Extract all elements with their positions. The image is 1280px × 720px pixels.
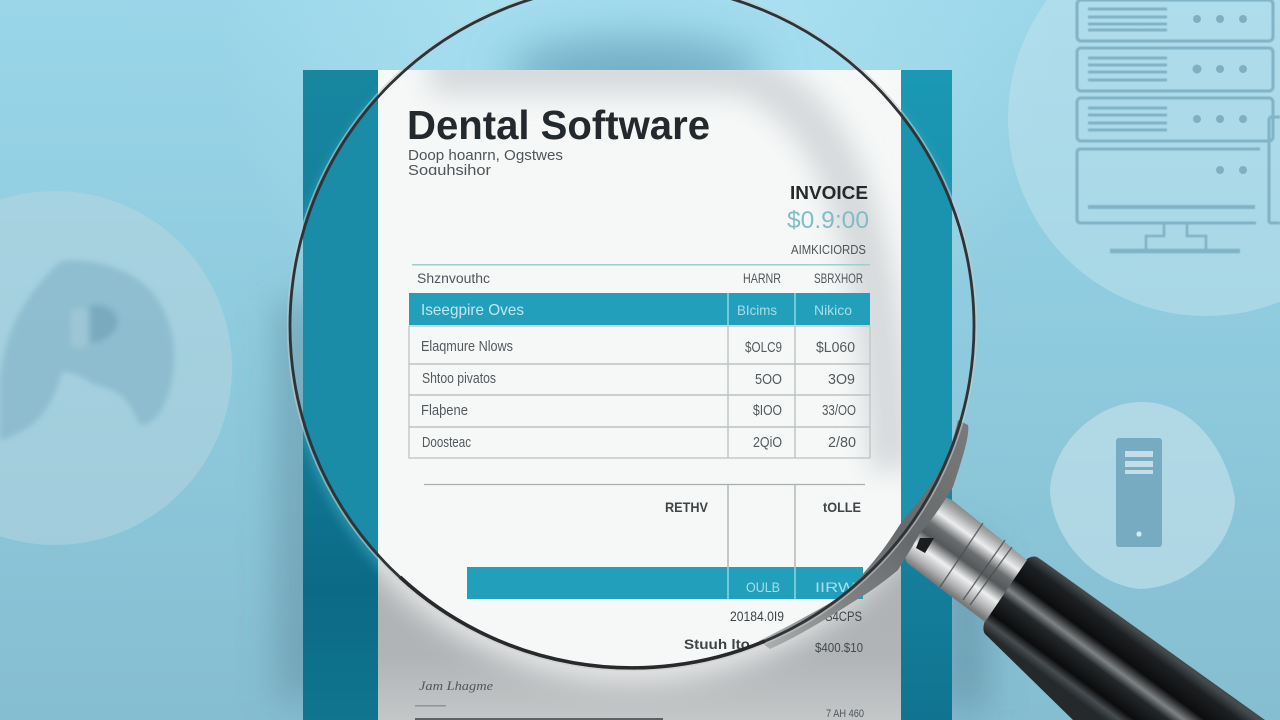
invoice label and amount: $0.9:00 — [787, 207, 869, 234]
table header bar: Iseegpire Oves — [421, 302, 524, 319]
table rows: $L060 — [816, 340, 855, 356]
document shadow left — [280, 300, 320, 700]
signature area: 7 AH 460 — [826, 708, 864, 720]
table header bar: Nikico — [814, 302, 852, 318]
totals section — [424, 484, 865, 655]
table rule and column headings: SBRXHOR — [814, 271, 863, 286]
table rows: $IOO — [753, 403, 782, 419]
document shadow right — [945, 540, 985, 710]
handle grip — [983, 557, 1265, 720]
totals section: $400.$10 — [815, 640, 863, 655]
icon: server rack and monitor badge — [1008, 0, 1280, 316]
table rows: 3O9 — [828, 372, 855, 388]
totals section: RETHV — [665, 499, 709, 515]
invoice content — [407, 102, 870, 720]
table rows: Doosteac — [422, 435, 471, 451]
table rows: 2QiO — [753, 435, 782, 451]
totals section: S4CPS — [825, 609, 862, 624]
icon: tower server badge — [1050, 402, 1235, 589]
total bar: OULB — [746, 579, 780, 595]
total bar: IIRW — [815, 579, 856, 595]
subtitle lines: Doop hoanrn, Ogstwes — [408, 148, 563, 164]
lens ring lower thick arc — [400, 577, 765, 668]
magnifying glass — [288, 0, 1265, 720]
table rule and column headings: Shznvouthc — [417, 271, 490, 286]
table header bar — [409, 293, 870, 325]
lens ring highlight — [288, 0, 976, 670]
table rows: $OLC9 — [745, 340, 782, 356]
totals section: Stuuh lto — [684, 636, 750, 652]
invoice label and amount: INVOICE — [790, 183, 868, 203]
lens halo on teal — [303, 98, 952, 572]
table rows — [421, 339, 856, 451]
total bar — [467, 567, 863, 599]
lens ring — [290, 0, 974, 668]
signature area — [415, 678, 864, 720]
subtitle lines — [408, 148, 563, 179]
table rule and column headings — [412, 264, 870, 286]
title: Dental Software — [407, 102, 710, 148]
table rows: Shtoo pivatos — [422, 371, 496, 387]
table rule and column headings: HARNR — [743, 271, 781, 286]
table header bar: BIcims — [737, 302, 777, 318]
invoice label and amount — [787, 183, 869, 257]
metal ferrule — [900, 490, 1027, 622]
lens halo on paper — [378, 557, 901, 694]
invoice label and amount: AIMKICIORDS — [791, 242, 866, 257]
teal invoice backing — [303, 70, 952, 720]
table rows: 5OO — [755, 372, 782, 388]
icon: dental tooth badge — [0, 191, 232, 545]
invoice table — [409, 293, 870, 458]
invoice paper outside lens — [378, 70, 901, 720]
lens collar crescent — [759, 420, 968, 649]
table rows: 33/OO — [822, 403, 856, 419]
table rows: Flaþene — [421, 403, 468, 419]
signature area: Jam Lhagme — [419, 678, 493, 693]
totals section: tOLLE — [823, 499, 861, 515]
subtitle lines: Soɑuhsihor — [408, 163, 491, 179]
table rows: Elaqmure Nlows — [421, 339, 513, 355]
totals section: 20184.0I9 — [730, 609, 784, 624]
table rows: 2/80 — [828, 435, 856, 451]
lens interior — [303, 0, 952, 666]
